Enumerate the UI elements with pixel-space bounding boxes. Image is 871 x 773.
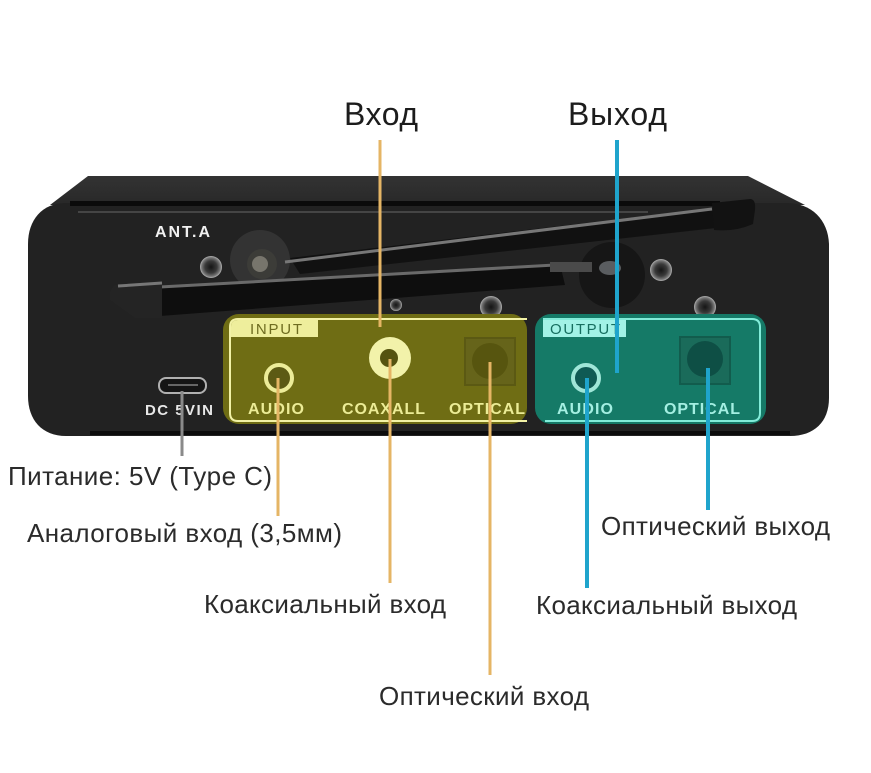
heading: Вход: Вход (344, 96, 418, 132)
panel: output: AUDIO (557, 401, 613, 418)
arrow: input (378, 140, 382, 327)
arrow: output (615, 140, 619, 373)
arrow: analog input (276, 378, 280, 516)
antenna upper (285, 199, 755, 274)
label: coaxial input: Коаксиальный вход (204, 589, 446, 619)
panel: input (223, 314, 527, 424)
panel: input: AUDIO (248, 401, 304, 418)
device front panel (28, 203, 829, 436)
label: ANT.A: ANT.A (155, 224, 210, 241)
device top face (50, 176, 805, 205)
panel: input: OPTICAL (449, 401, 525, 418)
label: optical input: Оптический вход (379, 681, 589, 711)
output audio jack (573, 365, 599, 391)
heading: Выход: Выход (568, 96, 667, 132)
arrow: optical input (488, 362, 492, 675)
input tag: INPUT (250, 321, 302, 338)
arrow: power (180, 391, 184, 456)
panel: input: COAXALL (342, 401, 425, 418)
panel: output (535, 314, 766, 424)
label: DC 5VIN: DC 5VIN (145, 402, 213, 419)
antenna socket right (579, 242, 645, 308)
screws (200, 256, 716, 318)
arrow: coaxial output (585, 378, 589, 588)
label: power: Питание: 5V (Type C) (8, 461, 272, 491)
optical input socket (465, 338, 515, 385)
antenna lower (110, 262, 592, 318)
label: optical output: Оптический выход (601, 511, 830, 541)
label: analog input: Аналоговый вход (3,5мм) (27, 518, 342, 548)
USB Type-C port (159, 378, 206, 393)
panel: output: OPTICAL (664, 401, 740, 418)
optical output socket (680, 337, 730, 384)
output tag: OUTPUT (550, 321, 620, 338)
audio jack (266, 365, 292, 391)
arrow: optical output (706, 368, 710, 510)
coaxial socket (369, 337, 411, 379)
device body (28, 176, 829, 436)
antenna socket left (230, 230, 290, 290)
input tag (231, 320, 318, 338)
arrow: coaxial input (388, 359, 392, 583)
label: coaxial output: Коаксиальный выход (536, 590, 797, 620)
